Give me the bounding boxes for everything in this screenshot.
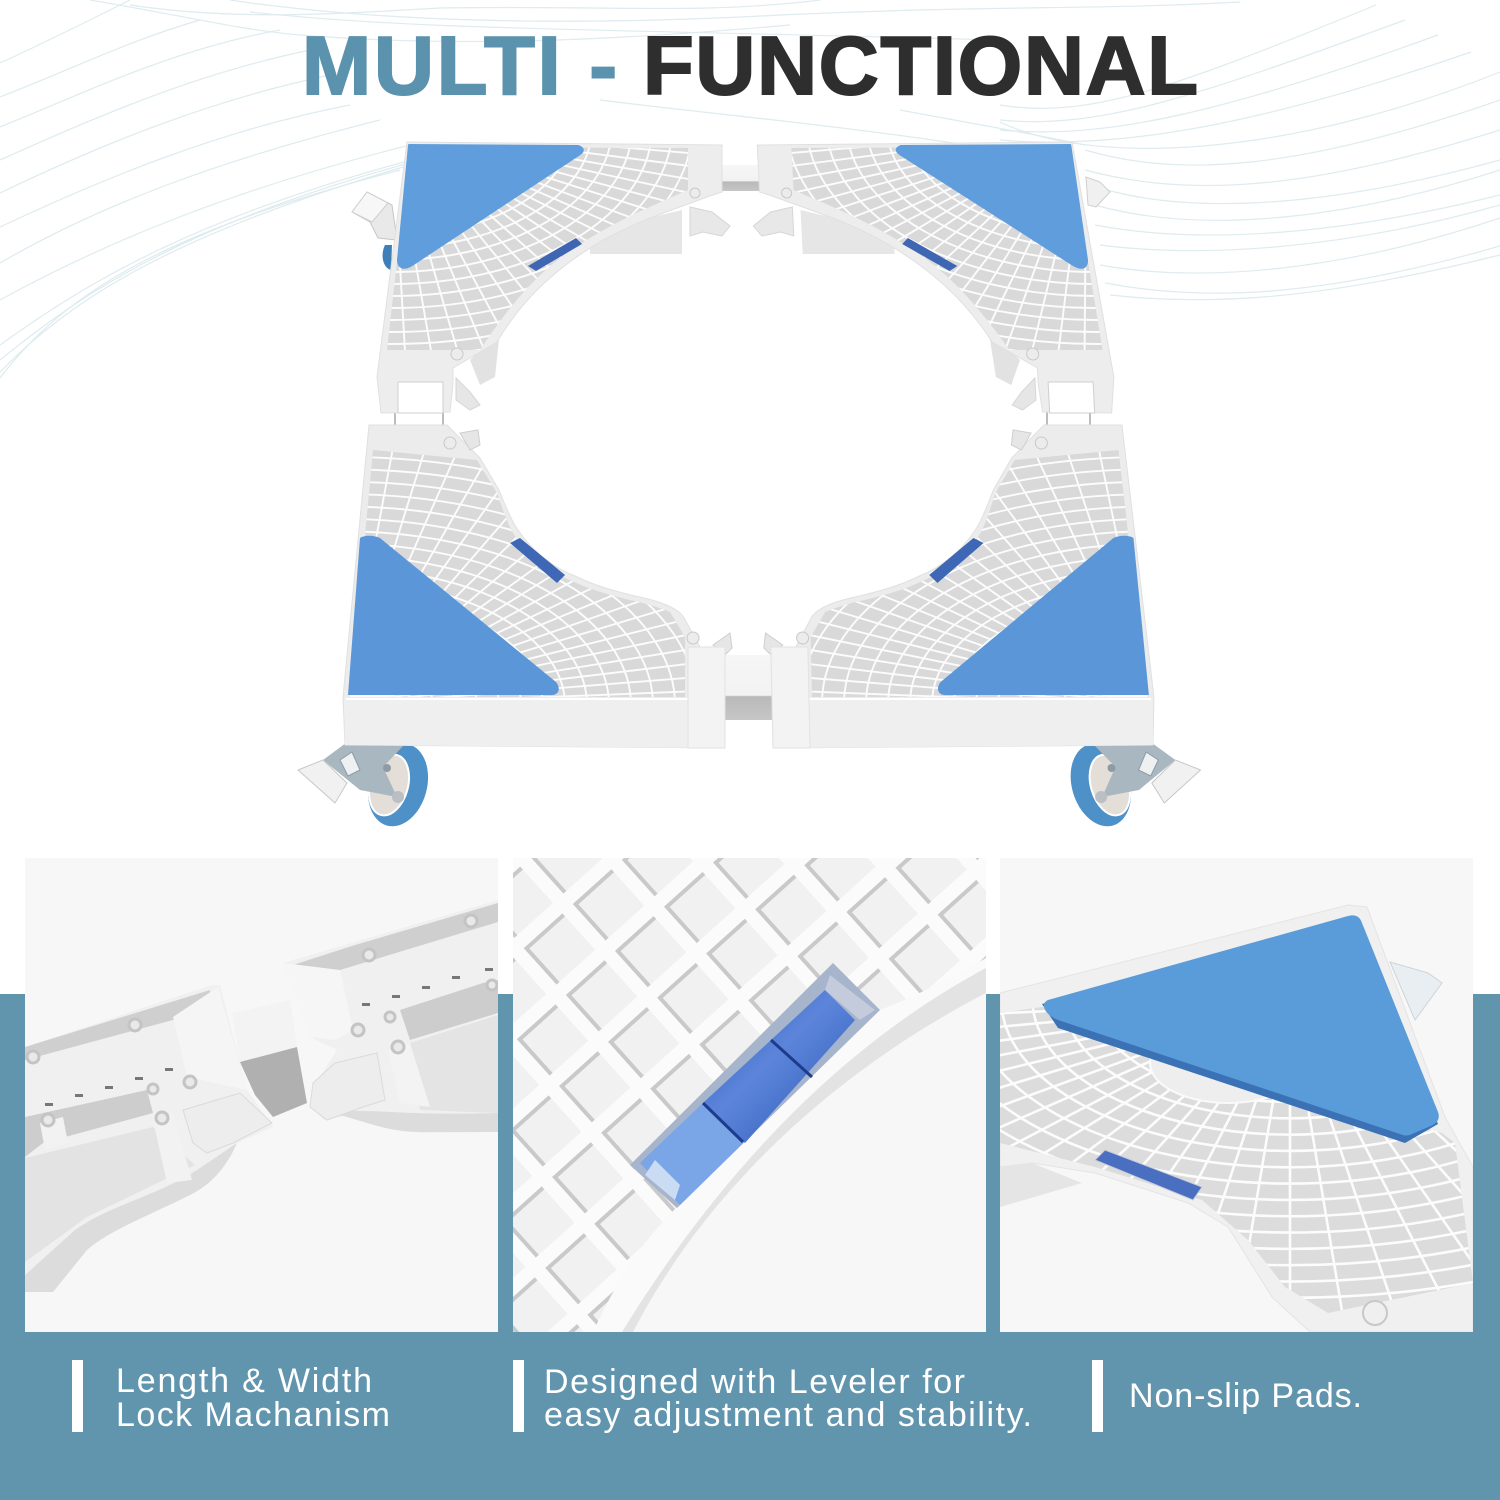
bottom-right plate xyxy=(528,358,1500,1052)
caption 1 marker bar xyxy=(72,1360,83,1432)
product photo: adjustable base xyxy=(0,0,1500,1052)
caption 1: Lock Machanism xyxy=(116,1396,390,1434)
front-left caster xyxy=(298,737,437,833)
rim shading xyxy=(622,968,986,1332)
caption 2: Designed with Leveler for xyxy=(544,1363,965,1401)
spirit level vial xyxy=(1095,1150,1202,1200)
title: FUNCTIONAL: FUNCTIONAL xyxy=(643,19,1198,112)
caption 1 xyxy=(116,1362,390,1434)
rear-right caster xyxy=(1086,177,1110,207)
silver lever xyxy=(1390,962,1442,1020)
caption 1: Length & Width xyxy=(116,1362,372,1400)
background wave lines xyxy=(0,0,1500,378)
front-right caster xyxy=(1061,737,1202,833)
blue pad xyxy=(1044,915,1439,1136)
panel: leveler close-up xyxy=(513,858,986,1332)
left bracket xyxy=(25,985,273,1292)
spirit level vial xyxy=(630,963,880,1208)
caption 2: easy adjustment and stability. xyxy=(544,1396,1032,1434)
panel: length and width lock xyxy=(25,858,498,1332)
plate rim xyxy=(593,958,986,1332)
panel: non-slip pads xyxy=(1000,904,1473,1332)
caption 3 marker bar xyxy=(1092,1360,1103,1432)
top-left plate xyxy=(0,0,952,464)
title xyxy=(302,19,1198,112)
mesh grid xyxy=(1000,1007,1473,1313)
caption 3: Non-slip Pads. xyxy=(1129,1377,1362,1415)
rear-left caster xyxy=(352,192,397,270)
plate underside xyxy=(1000,1163,1082,1207)
pad shadow xyxy=(1042,1003,1438,1143)
caption 2 marker bar xyxy=(513,1360,524,1432)
blue background band xyxy=(0,994,1500,1500)
right bracket xyxy=(283,900,498,1133)
turntable dial xyxy=(1149,1058,1269,1104)
top-right plate xyxy=(510,0,1500,464)
metal rail xyxy=(240,1047,307,1117)
caption 2 xyxy=(544,1363,1032,1434)
plate body xyxy=(1000,905,1473,1332)
metal rails xyxy=(395,165,1090,720)
screw xyxy=(1363,1301,1387,1325)
mesh grid xyxy=(513,858,986,1332)
bottom-left plate xyxy=(0,358,961,1052)
title: MULTI: MULTI - xyxy=(302,19,617,112)
